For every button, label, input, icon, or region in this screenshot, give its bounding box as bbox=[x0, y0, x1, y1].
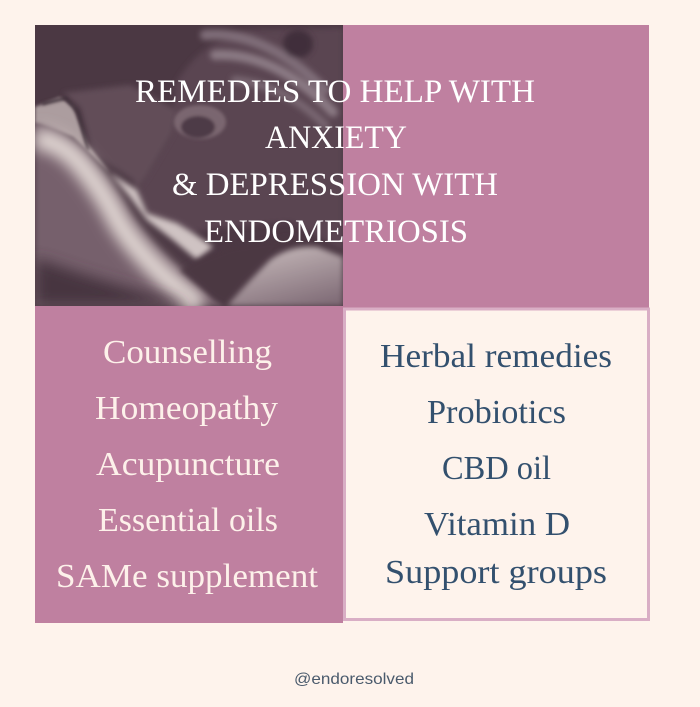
left remedies list bbox=[56, 334, 319, 595]
neck bbox=[63, 85, 177, 190]
right remedies list bbox=[380, 338, 612, 591]
left remedies list: Homeopathy bbox=[95, 390, 278, 427]
title: REMEDIES TO HELP WITH bbox=[135, 74, 535, 110]
title bbox=[135, 74, 535, 250]
title: ANXIETY bbox=[265, 120, 407, 156]
arm base bbox=[35, 123, 227, 306]
right remedies list: CBD oil bbox=[442, 450, 551, 487]
upper back skin bbox=[35, 97, 110, 173]
hair streaks bbox=[205, 30, 333, 125]
right shoulder bbox=[227, 247, 343, 306]
ear bbox=[174, 105, 226, 139]
left remedies list: Acupuncture bbox=[96, 446, 280, 483]
right remedies list: Probiotics bbox=[427, 394, 566, 431]
left remedies list: SAMe supplement bbox=[56, 558, 319, 595]
dark sleeve shadow bbox=[178, 252, 224, 304]
title: & DEPRESSION WITH bbox=[172, 167, 498, 203]
head and face bbox=[137, 28, 343, 250]
left remedies list: Essential oils bbox=[98, 502, 278, 539]
panel: bottom left pink block bbox=[35, 306, 343, 623]
panel: photo of woman with head bowed bbox=[35, 25, 343, 306]
title: ENDOMETRIOSIS bbox=[204, 214, 468, 250]
panel: top right pink block bbox=[343, 25, 649, 308]
panel: bottom right outlined box bbox=[344, 309, 648, 620]
arm highlight bbox=[35, 138, 200, 306]
lower arm shadow bbox=[35, 258, 190, 306]
right remedies list: Support groups bbox=[385, 554, 607, 591]
right remedies list: Herbal remedies bbox=[380, 338, 612, 375]
chest highlight bbox=[110, 173, 213, 260]
left remedies list: Counselling bbox=[103, 334, 272, 371]
right remedies list: Vitamin D bbox=[424, 506, 570, 543]
footer handle: @endoresolved bbox=[294, 671, 414, 688]
bra strap bbox=[42, 98, 88, 150]
